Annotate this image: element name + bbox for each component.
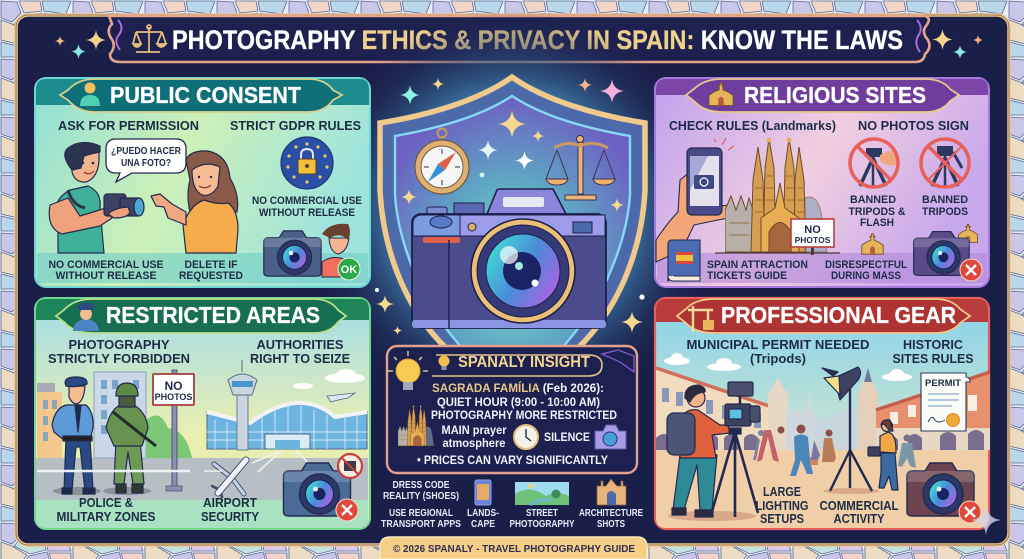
text: delete if requested: DELETE IF [184,259,238,271]
text: large lighting setups: SETUPS [760,511,804,526]
text: check rules landmarks: CHECK RULES (Landmarks) [669,118,836,133]
text: no commercial use (left): WITHOUT RELEASE [56,270,156,282]
icon: camera with consenting person: OK [341,264,357,276]
text: disrespectful during mass: DISRESPECTFUL [825,259,907,271]
text: photography strictly forbidden [48,337,190,366]
text: strict GDPR rules: STRICT GDPR RULES [230,118,361,133]
icon: permit document [921,373,970,431]
text: police and military zones: MILITARY ZONES [56,509,156,524]
text: banned tripods and flash [848,194,906,229]
text: municipal permit needed: (Tripods) [750,351,806,366]
icon: silent camera [595,425,626,449]
callout: speech bubble: ¿PUEDO HACER [111,146,182,157]
text: use regional transport apps: USE REGIONAL [389,508,453,519]
icon: landscape [515,482,569,505]
icon: banned professional camera [907,463,981,523]
illustration: clouds [664,353,912,381]
callout: speech bubble [106,139,186,182]
panel: spanaly insight [387,346,637,473]
illustration: hand with phone [656,138,734,262]
illustration: photographer with tripod [667,382,760,521]
illustration: plaza buildings [656,368,990,450]
sparkles: header left and right [55,29,983,59]
text: landscape [467,508,499,530]
text: historic sites rules [892,337,974,366]
sign: no photos [153,370,194,491]
icon: light bulb [388,351,428,390]
heading: public consent: PUBLIC CONSENT [110,82,301,108]
sign: no photos [791,219,834,255]
shield [380,77,645,372]
illustration: cathedral [725,138,827,252]
heading: spanaly insight: SPANALY INSIGHT [458,354,590,371]
icon: GDPR padlock on EU circle [281,137,333,189]
text: police and military zones: POLICE & [79,495,133,510]
text: delete if requested [179,259,243,282]
text: commercial activity: COMMERCIAL [820,498,899,513]
illustration: soldier with rifle [103,383,156,495]
illustration: police officer [52,377,101,495]
text: disrespectful during mass: DURING MASS [831,270,901,282]
icon: scales [546,136,615,200]
text: banned tripods and flash: BANNED [850,194,896,206]
text: architecture shots: ARCHITECTURE [579,508,643,519]
sign: no photos: PHOTOS [795,235,831,245]
text: street photography: PHOTOGRAPHY [510,519,575,530]
text: historic sites rules: HISTORIC [903,337,964,352]
text: municipal permit needed: MUNICIPAL PERMIT NEEDED [686,337,870,352]
icon: guide book [668,240,700,281]
text: historic sites rules: SITES RULES [892,351,974,366]
text: large lighting setups: LARGE [763,484,801,499]
panel: professional gear [655,298,990,529]
text: banned tripods and flash: TRIPODS & [848,206,906,218]
text: no photos sign: NO PHOTOS SIGN [858,118,969,133]
callout: speech bubble: UNA FOTO? [121,158,171,169]
icon: scales of justice [133,25,166,52]
text: delete if requested: REQUESTED [179,270,243,282]
text: large lighting setups: LIGHTING [756,498,808,513]
illustration: woman [151,151,238,253]
text: disrespectful during mass [825,259,907,282]
text: prices can vary: • PRICES CAN VARY SIGNIFICANTLY [417,453,608,467]
text: commercial activity: ACTIVITY [834,511,885,526]
sign: no photos: NO [164,379,182,393]
illustration: airport terminal and tower [207,360,367,450]
text: street photography: STREET [526,508,558,519]
text: dress code reality: DRESS CODE [392,480,450,491]
text: police and military zones [56,495,156,524]
footer: copyright [380,537,647,559]
icon: banned tripods and flash [850,139,898,187]
text: main prayer atmosphere [442,423,507,450]
text: architecture shots: SHOTS [597,519,625,530]
text: street photography [510,508,575,530]
text: main prayer atmosphere: atmosphere [442,436,506,450]
icon: small church [862,234,883,254]
text: photography more restricted: PHOTOGRAPHY MORE RESTRICTED [431,408,617,422]
illustration: city buildings [37,372,192,458]
text: banned tripods: BANNED [922,194,968,206]
text: no commercial use (right): WITHOUT RELEASE [259,207,355,219]
heading: public consent [60,79,342,112]
text: municipal permit needed [686,337,870,366]
icon: transport phone [475,480,491,505]
text: spain attraction tickets guide [707,259,808,282]
text: spain attraction tickets guide: SPAIN ATTRACTION [707,259,808,271]
icon: seized camera [284,454,362,521]
text: silence: SILENCE [544,430,590,444]
illustration: photographer [49,142,144,253]
title banner [109,16,929,62]
text: use regional transport apps: TRANSPORT APPS [381,519,461,530]
heading: spanaly insight [432,354,602,376]
panel: public consent [35,78,370,287]
illustration: clouds and plane in sky [293,369,365,402]
text: use regional transport apps [381,508,461,530]
icon: clock [514,425,538,449]
text: quiet hour: QUIET HOUR (9:00 - 10:00 AM) [437,395,600,409]
text: authorities right to seize [250,337,350,366]
text: spain attraction tickets guide: TICKETS GUIDE [707,270,787,282]
text: airport security: AIRPORT [203,495,257,510]
text: airport security: SECURITY [201,509,259,524]
heading: restricted areas [56,299,346,333]
icon: permit document: PERMIT [925,378,961,389]
icon: camera [412,189,606,328]
heading: religious sites [686,79,959,112]
sign: no photos: NO [804,224,821,236]
text: banned tripods and flash: FLASH [860,217,894,229]
text: banned tripods [922,194,968,218]
icon: banned tripods [921,139,969,187]
icon: camera with consenting person [264,224,360,280]
text: photography strictly forbidden: STRICTLY FORBIDDEN [48,351,190,366]
text: landscape: CAPE [471,519,495,530]
text: authorities right to seize: RIGHT TO SEIZE [250,351,350,366]
text: landscape: LANDS- [467,508,499,519]
heading: professional gear [677,299,970,333]
heading: religious sites: RELIGIOUS SITES [744,82,926,108]
sign: no photos: PHOTOS [155,392,192,402]
icon: mini cathedral [398,406,434,446]
text: architecture shots [579,508,643,530]
text: commercial activity [820,498,899,526]
icon: compass [415,128,469,194]
text: airport security [201,495,259,524]
text: banned tripods: TRIPODS [922,206,968,218]
text: photography strictly forbidden: PHOTOGRAPHY [68,337,170,352]
illustration: lighting stand [822,367,879,494]
title text: PHOTOGRAPHY ETHICS & PRIVACY IN SPAIN: KNOW THE LAWS [172,25,903,55]
text: dress code reality: REALITY (SHOES) [383,491,459,502]
heading: professional gear: PROFESSIONAL GEAR [721,302,956,328]
sparkles in and around shield [375,78,645,335]
text: sagrada familia date: SAGRADA FAMÍLIA (Feb 2026): [432,380,604,395]
text: dress code reality [383,480,459,502]
illustration: pedestrians [753,424,916,476]
text: ask for permission: ASK FOR PERMISSION [58,118,199,133]
panel: religious sites [655,78,989,287]
panel: restricted areas [35,298,370,529]
text: no commercial use (right) [252,195,362,219]
illustration: woman with gear [868,420,898,490]
text: authorities right to seize: AUTHORITIES [256,337,344,352]
icon: camera banned in church [914,224,982,281]
text: no commercial use (left): NO COMMERCIAL USE [48,259,164,271]
text: no commercial use (left) [48,259,164,282]
center shield with camera [307,10,717,420]
illustration: runway plane [212,460,246,497]
icon: architecture [597,479,626,505]
heading: restricted areas: RESTRICTED AREAS [106,302,320,328]
text: main prayer atmosphere: MAIN prayer [442,423,507,437]
text: large lighting setups [756,484,808,526]
text: no commercial use (right): NO COMMERCIAL USE [252,195,362,207]
footer: copyright: © 2026 SPANALY - TRAVEL PHOTOGRAPHY GUIDE [393,543,635,555]
